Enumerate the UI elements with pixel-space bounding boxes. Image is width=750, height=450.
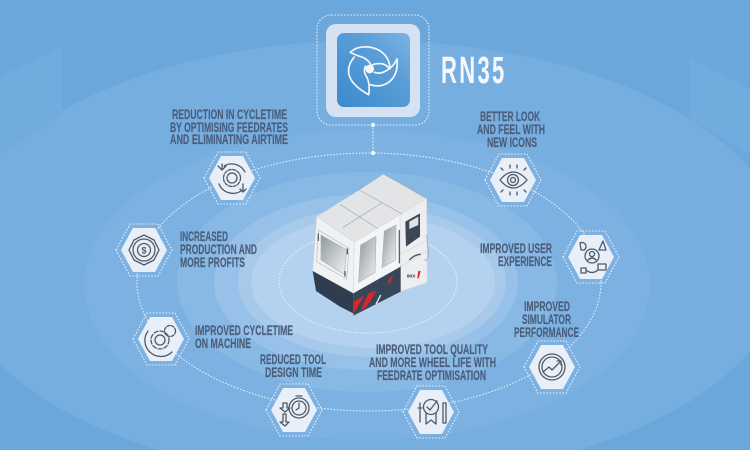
label: AND FEEL WITH [477,122,545,137]
icon: gear with cycle arrows [218,164,246,193]
hexagon badge [563,231,619,283]
icon: growth chart in ring [539,354,565,380]
label [477,109,545,150]
label: MORE PROFITS [180,255,245,270]
hexagon badge [485,154,541,206]
icon: stopwatch with down arrows [280,396,309,426]
label: AND ELIMINATING AIRTIME [170,132,288,147]
item: look and feel [477,109,545,206]
label: PERFORMANCE [514,325,579,340]
icon: dollar gear: $ [142,246,147,256]
label: NEW ICONS [487,135,537,150]
item: increased production [116,224,257,276]
hexagon badge [204,152,260,204]
label: IMPROVED USER [480,241,552,256]
label: PRODUCTION AND [180,242,257,257]
label: DESIGN TIME [265,365,322,380]
item: user experience [480,231,619,283]
RN35 product title: RN35 [441,49,507,92]
icon: dollar gear [129,235,159,265]
label [514,299,579,340]
icon: quality ribbon and tools [418,400,446,424]
logo tile [317,15,429,125]
label [369,342,496,383]
icon: gears [145,326,176,357]
label: EXPERIENCE [498,254,552,269]
hexagon badge [266,384,322,436]
dotted orbit lines [137,123,601,411]
label: ON MACHINE [195,336,251,351]
icon: user with tools [580,241,606,273]
label: IMPROVED TOOL QUALITY [376,342,488,357]
label: SIMULATOR [522,312,571,327]
hexagon badge [403,386,459,438]
label: IMPROVED CYCLETIME [195,323,293,338]
item: cycletime on machine [133,313,293,365]
label: AND MORE WHEEL LIFE WITH [369,355,496,370]
label: REDUCTION IN CYCLETIME [172,107,287,122]
machine illustration [313,174,429,316]
label [480,241,552,269]
item: tool quality [369,342,496,438]
label: REDUCED TOOL [260,352,326,367]
machine illustration: IMX [407,274,416,280]
label: BY OPTIMISING FEEDRATES [170,120,288,135]
logo swirl mark [349,47,397,95]
label [180,229,257,270]
label [170,107,288,147]
label [195,323,293,351]
item: tool design time [260,352,326,436]
label: INCREASED [180,229,228,244]
item: cycletime reduction [170,107,288,204]
label: FEEDRATE OPTIMISATION [377,368,486,383]
hexagon badge [133,313,189,365]
item: simulator performance [514,299,580,393]
label: BETTER LOOK [480,109,540,124]
label: IMPROVED [524,299,570,314]
icon: eye [500,165,527,195]
hexagon badge [116,224,172,276]
label [260,352,326,380]
hexagon badge [524,341,580,393]
